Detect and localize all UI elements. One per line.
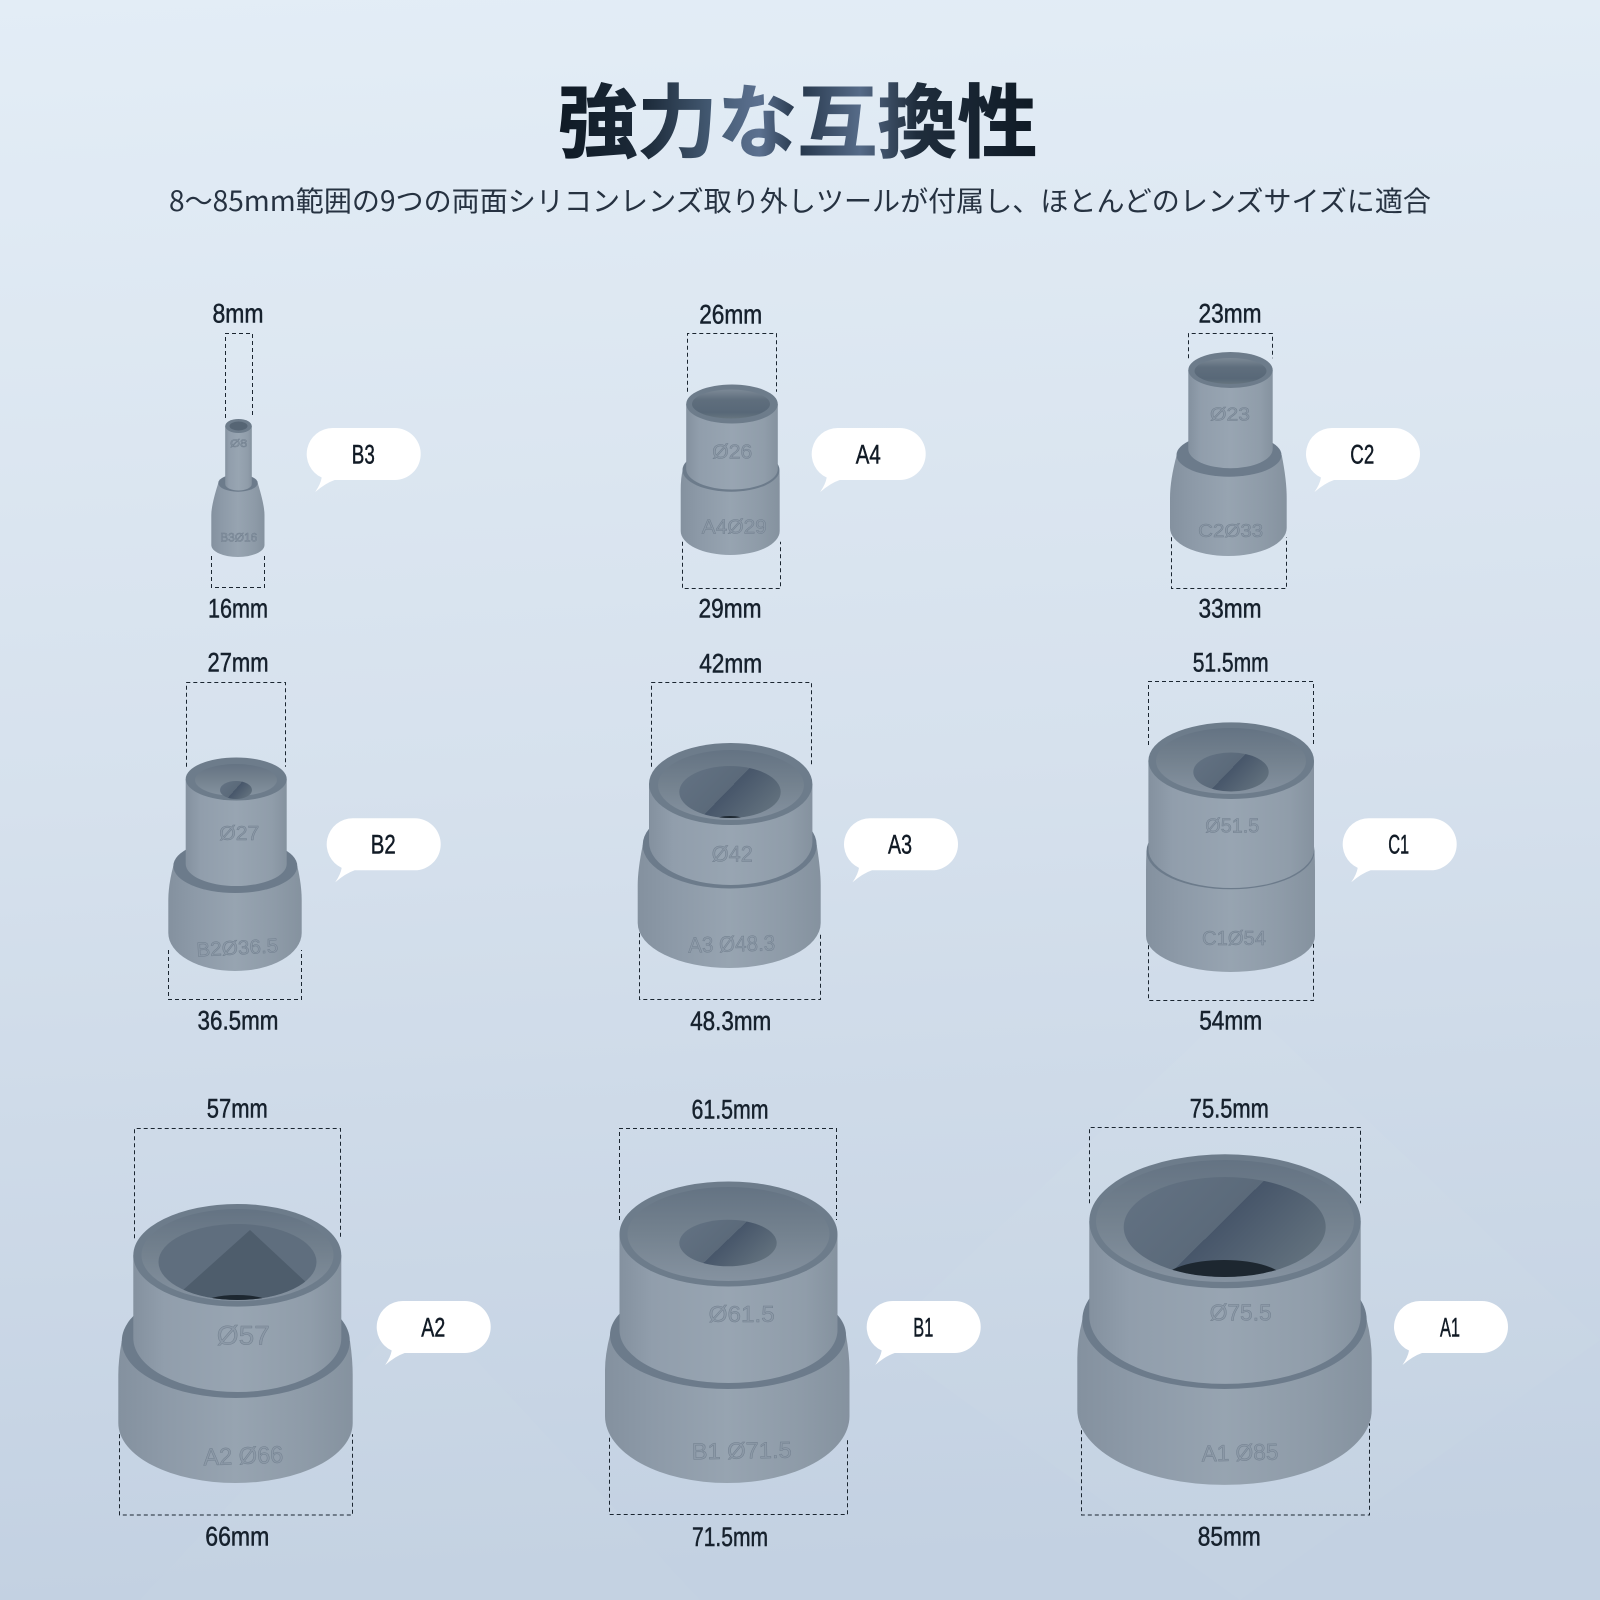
tool panel: B1 [605,1094,981,1552]
callout A1: A1 [1440,1313,1460,1343]
silicone tool C1: Ø51.5 [1205,816,1259,838]
callout B3 [307,428,421,492]
silicone tool B3: B3Ø16 [220,530,258,544]
bottom dimension 54mm: 54mm [1199,1005,1262,1035]
bottom dimension 66mm [120,1434,352,1551]
top dimension 26mm: 26mm [699,299,762,329]
top dimension 8mm [212,299,264,418]
top dimension 26mm [688,299,776,392]
bottom dimension 36.5mm [168,950,302,1035]
silicone tool C1: C1Ø54 [1202,928,1266,950]
callout B1 [867,1301,981,1365]
silicone tool B1 [605,1182,850,1483]
callout A1 [1394,1301,1508,1365]
silicone tool C2: C2Ø33 [1198,521,1263,541]
silicone tool A1: Ø75.5 [1210,1300,1272,1326]
silicone tool A3 [638,743,821,968]
callout A4 [812,428,926,492]
silicone tool A4: Ø26 [712,442,752,464]
silicone tool A1: A1 Ø85 [1201,1438,1279,1467]
silicone tool B2: Ø27 [219,823,259,845]
tool panel: B3 [208,299,421,624]
silicone tool C1 [1146,722,1315,972]
top dimension 42mm [652,649,812,767]
silicone tool C2: Ø23 [1210,404,1250,424]
top dimension 23mm [1188,299,1272,358]
bottom dimension 48.3mm: 48.3mm [690,1006,771,1036]
silicone tool A4: A4Ø29 [702,516,767,538]
top dimension 8mm: 8mm [212,299,264,329]
top dimension 61.5mm [620,1094,836,1220]
callout C2: C2 [1350,439,1374,469]
title: 強力な互換性 [558,79,1038,168]
silicone tool A2: Ø57 [217,1320,270,1350]
bottom dimension 33mm [1172,537,1286,624]
silicone tool B3: Ø8 [230,438,247,450]
bottom dimension 16mm: 16mm [208,594,268,624]
top dimension 51.5mm [1148,648,1314,745]
callout A2: A2 [421,1313,445,1343]
top dimension 75.5mm [1090,1093,1360,1203]
silicone tool A4 [681,384,780,555]
bottom dimension 16mm [208,556,268,624]
silicone tool B1: B1 Ø71.5 [691,1437,792,1464]
top dimension 27mm: 27mm [208,648,268,678]
tool panel: A3 [638,649,958,1036]
tool panel: A4 [681,299,926,624]
silicone tool A1 [1077,1154,1372,1485]
tool panel: A1 [1077,1093,1508,1551]
top dimension 42mm: 42mm [699,649,762,679]
bottom dimension 48.3mm [640,933,820,1036]
top dimension 75.5mm: 75.5mm [1190,1093,1269,1123]
silicone tool A3: Ø42 [712,842,753,866]
callout B2 [327,818,441,882]
bottom dimension 71.5mm [610,1438,848,1552]
bottom dimension 36.5mm: 36.5mm [198,1005,278,1035]
callout B1: B1 [913,1313,933,1343]
bottom dimension 85mm: 85mm [1198,1521,1261,1551]
top dimension 27mm [186,648,286,767]
silicone tool C2 [1170,352,1287,556]
bottom dimension 29mm [682,542,780,624]
silicone tool B2: B2Ø36.5 [196,935,279,962]
tool panel: C2 [1170,299,1420,624]
top dimension 57mm [134,1093,340,1238]
silicone tool B2 [168,758,302,971]
bottom dimension 33mm: 33mm [1198,594,1262,624]
tool panel: C1 [1146,648,1457,1035]
silicone tool B1: Ø61.5 [709,1301,775,1327]
top dimension 23mm: 23mm [1198,299,1262,329]
top dimension 51.5mm: 51.5mm [1193,648,1269,678]
top dimension 61.5mm: 61.5mm [692,1094,768,1124]
bottom dimension 29mm: 29mm [698,594,762,624]
callout A2 [377,1301,491,1365]
bottom dimension 54mm [1148,938,1314,1035]
top dimension 57mm: 57mm [207,1093,268,1123]
callout A3: A3 [888,829,912,859]
silicone tool A2 [118,1204,353,1483]
callout A3 [844,818,958,882]
tool panel: A2 [118,1093,491,1551]
subtitle: 8〜85mm範囲の9つの両面シリコンレンズ取り外しツールが付属し、ほとんどのレンズサイズに適合 [169,180,1431,220]
silicone tool A3: A3 Ø48.3 [688,930,776,958]
silicone tool B3 [211,419,264,557]
callout A4: A4 [856,439,881,469]
silicone tool A2: A2 Ø66 [203,1442,284,1471]
bottom dimension 71.5mm: 71.5mm [692,1522,768,1552]
callout C1: C1 [1388,829,1409,859]
bottom dimension 66mm: 66mm [205,1521,269,1551]
bottom dimension 85mm [1082,1423,1370,1551]
callout B2: B2 [371,829,396,859]
callout C2 [1306,428,1420,492]
callout C1 [1343,818,1457,882]
callout B3: B3 [352,439,375,469]
tool panel: B2 [168,648,441,1035]
